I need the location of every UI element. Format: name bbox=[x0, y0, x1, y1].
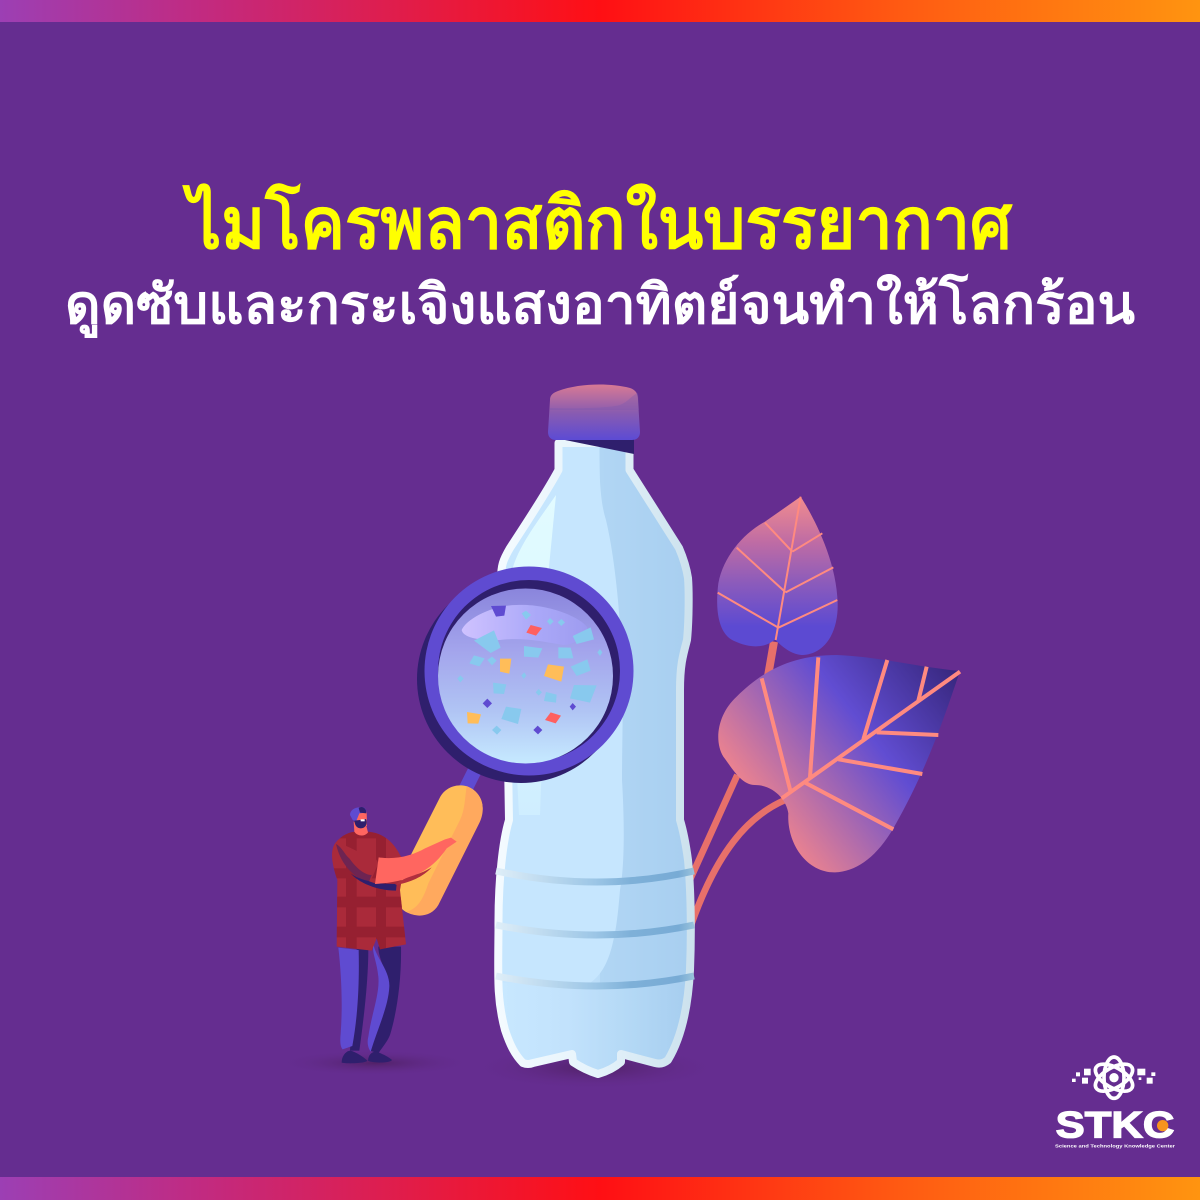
pixel dots bbox=[1072, 1069, 1155, 1084]
torso shadow bbox=[351, 873, 397, 891]
orange fragments bbox=[467, 659, 564, 724]
shoes bbox=[342, 1051, 392, 1063]
bottle cap bbox=[548, 385, 640, 440]
magnifier handle bbox=[407, 786, 483, 916]
magnifier rim bbox=[424, 566, 634, 776]
logo wordmark: STKC bbox=[1056, 1104, 1174, 1146]
magnifier lens bbox=[438, 588, 613, 764]
near leg bbox=[338, 948, 359, 1049]
lens glare bbox=[462, 605, 587, 645]
small upper leaf bbox=[717, 497, 838, 655]
magnifier handle stem bbox=[464, 768, 476, 792]
shirt bbox=[332, 832, 406, 950]
bottle ribs bbox=[496, 871, 694, 986]
leaf stems bbox=[688, 642, 785, 923]
top gradient bar bbox=[0, 0, 1200, 22]
magnifying glass bbox=[417, 566, 634, 792]
ground shadow: person bbox=[277, 1050, 473, 1076]
plant leaves bbox=[688, 497, 960, 923]
purple fragments bbox=[483, 606, 576, 734]
logo tagline: Science and Technology Knowledge Center bbox=[1055, 1143, 1175, 1148]
plastic bottle bbox=[490, 385, 695, 1074]
ground shadow: bottle bbox=[470, 1046, 720, 1090]
far leg bbox=[370, 947, 401, 1053]
bottle outline bbox=[498, 443, 691, 1074]
arm sleeve bbox=[336, 844, 378, 883]
bottom gradient bar bbox=[0, 1177, 1200, 1200]
magnifier rim shadow bbox=[417, 575, 625, 783]
bottle light and shade areas bbox=[513, 447, 624, 982]
near leg shadow bbox=[350, 948, 368, 1051]
atom icon bbox=[1091, 1057, 1137, 1098]
magnifier inner shadow bbox=[438, 580, 620, 762]
title line 2: ดูดซับและกระเจิงแสงอาทิตย์จนทำให้โลกร้อน bbox=[65, 273, 1135, 338]
far leg highlight bbox=[368, 943, 389, 1052]
arm shadow bbox=[336, 844, 372, 883]
logo orange dot bbox=[1157, 1120, 1168, 1131]
bottle body bbox=[498, 443, 691, 1074]
microplastics in lens bbox=[457, 605, 602, 735]
forearm bbox=[375, 838, 457, 884]
large lower leaf bbox=[718, 655, 960, 872]
forearm shade bbox=[395, 867, 432, 885]
title line 1: ไมโครพลาสติกในบรรยากาศ bbox=[181, 181, 1013, 264]
neck shadow bbox=[560, 439, 634, 454]
blue fragments bbox=[457, 611, 602, 735]
head bbox=[350, 807, 368, 836]
title bbox=[65, 181, 1135, 338]
red fragments bbox=[526, 625, 561, 723]
person holding magnifier bbox=[327, 786, 483, 1063]
STKC logo bbox=[1055, 1057, 1175, 1148]
